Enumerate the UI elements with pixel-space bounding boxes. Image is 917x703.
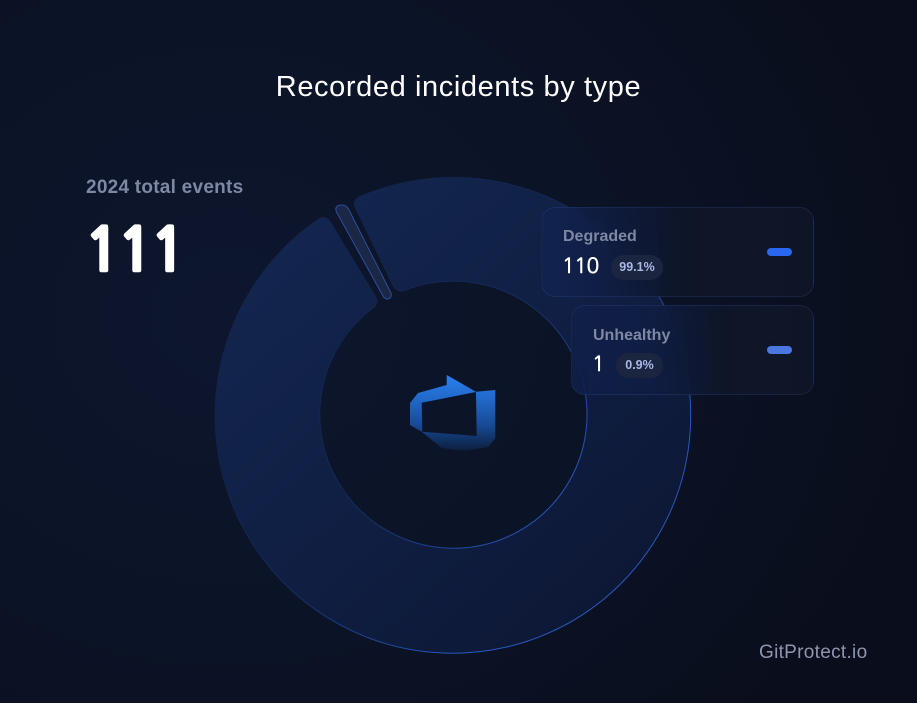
percent pill: 99.1%: 99.1% bbox=[619, 260, 655, 274]
legend dash: degraded bbox=[767, 248, 792, 256]
icon: azure devops logo bbox=[410, 375, 495, 451]
card: degraded bbox=[541, 207, 814, 297]
title: Recorded incidents by type bbox=[276, 71, 641, 103]
segment: degraded bbox=[215, 177, 691, 653]
legend dash: unhealthy bbox=[767, 346, 792, 354]
percent pill: 0.9%: 0.9% bbox=[625, 358, 654, 372]
value: 110: 110 bbox=[562, 256, 599, 277]
label: unhealthy: Unhealthy bbox=[593, 327, 670, 344]
total events number: 111 bbox=[84, 221, 183, 280]
percent pill: 99.1% bbox=[611, 255, 663, 280]
value: 1: 1 bbox=[592, 354, 604, 375]
label: degraded: Degraded bbox=[563, 228, 637, 245]
card: unhealthy bbox=[571, 305, 814, 395]
percent pill: 0.9% bbox=[616, 353, 663, 378]
brand: gitprotect: GitProtect.io bbox=[759, 642, 867, 663]
segment: unhealthy bbox=[336, 205, 391, 299]
total events label: 2024 total events bbox=[86, 177, 243, 198]
